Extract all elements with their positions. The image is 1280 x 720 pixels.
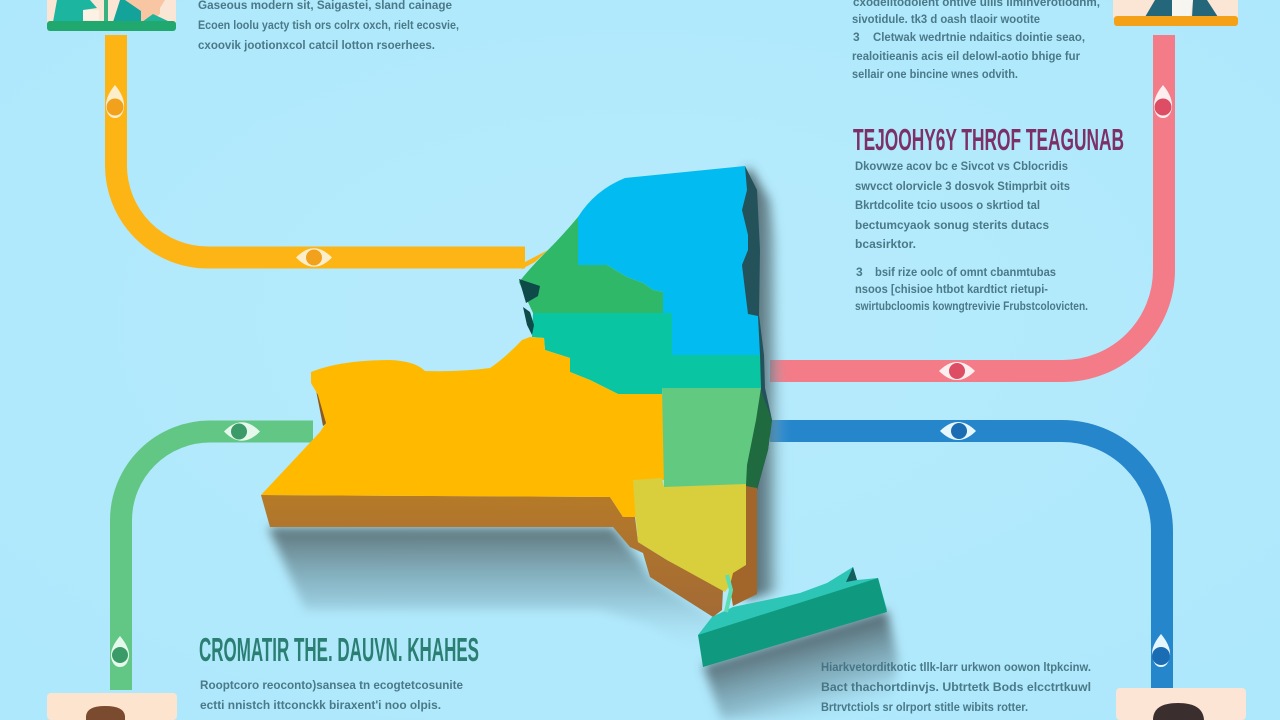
map shadow: below [268,527,735,655]
text block: right panel [855,159,1088,313]
connector: yellow line [106,35,525,267]
connector: blue line [770,422,1170,688]
text block: bottom-right [821,660,1091,714]
map side: brown edge [261,495,723,617]
text block: right panel: 3 [856,265,863,279]
text block: top-right [852,0,1100,81]
text block: bottom-right: Bact thachortdinvjs. Ubtrtetk Bods elcctrtkuwl [821,680,1091,694]
marker: blue horizontal [940,422,976,440]
yellow connector tail [520,250,548,270]
text block: top-right: sellair one bincine wnes odvith. [852,67,1018,81]
text block: right panel: swirtubcloomis kowngtrevivie Frubstcolovicten. [855,299,1088,313]
marker: yellow vertical [106,85,124,118]
region: lime [633,478,746,592]
island top [698,567,887,640]
text block: top-right: realoitieanis acis eil delowl-aotio bhige fur [852,49,1080,63]
region: yellow [261,337,664,517]
region: blue [578,166,760,355]
text block: right panel: swvcct olorvicle 3 dosvok Stimprbit oits [855,179,1070,193]
panel: top-left illustration [47,0,176,31]
text block: right panel: bsif rize oolc of omnt cbanmtubas [875,265,1056,279]
panel: top-right illustration [1113,0,1238,26]
text block: bottom-right: Brtrvtctiols sr olrport stitle wibits rotter. [821,700,1028,714]
text block: right panel: bcasirktor. [855,237,916,251]
island shadow [703,610,898,720]
marker: green horizontal [224,422,260,441]
text block: bottom-right: Hiarkvetorditkotic tllk-larr urkwon oowon ltpkcinw. [821,660,1091,674]
heading: bottom-left: CROMATIR THE. DAUVN. KHAHES [199,631,479,668]
marker: pink horizontal [939,362,975,380]
island front [698,578,887,667]
text block: right panel: bectumcyaok sonug sterits dutacs [855,218,1049,232]
text block: bottom-left [200,678,463,712]
marker: green vertical [111,636,129,667]
text block: bottom-left: Rooptcoro reoconto)sansea tn ecogtetcosunite [200,678,463,692]
connector: pink line [770,35,1172,380]
stream [726,575,731,612]
marker: pink vertical [1154,85,1172,118]
text block: right panel: nsoos [chisioe htbot kardtict rietupi- [855,282,1048,296]
text block: right panel: Dkovwze acov bc e Sivcot vs Cblocridis [855,159,1068,173]
map: state with shadow and regions [261,166,785,655]
text block: top-left [198,0,459,52]
marker: blue vertical [1152,634,1170,667]
region: teal [532,313,761,394]
text block: top-left: Ecoen loolu yacty tish ors colrx oxch, rielt ecosvie, [198,18,459,32]
text block: top-left: cxoovik jootionxcol catcil lotton rsoerhees. [198,38,435,52]
map shadow: right [745,168,785,600]
island [698,567,898,720]
marker: yellow horizontal [296,248,332,267]
text block: top-right: 3 [853,30,860,44]
panel: bottom-right illustration [1116,688,1246,720]
map notches: dark lake marks [519,279,540,335]
connector: green line [111,422,313,690]
text block: top-right: Cletwak wedrtnie ndaitics dointie seao, [873,30,1085,44]
text block: bottom-left: ectti nnistch ittconckk biraxent'i noo olpis. [200,698,441,712]
text block: top-right: sivotidule. tk3 d oash tlaoir wootite [852,12,1040,26]
region: green [519,217,663,313]
region: light green [662,388,761,488]
text block: right panel: Bkrtdcolite tcio usoos o skrtiod tal [855,198,1040,212]
map side: dark east edge [735,166,772,490]
panel: bottom-left illustration [47,693,177,720]
